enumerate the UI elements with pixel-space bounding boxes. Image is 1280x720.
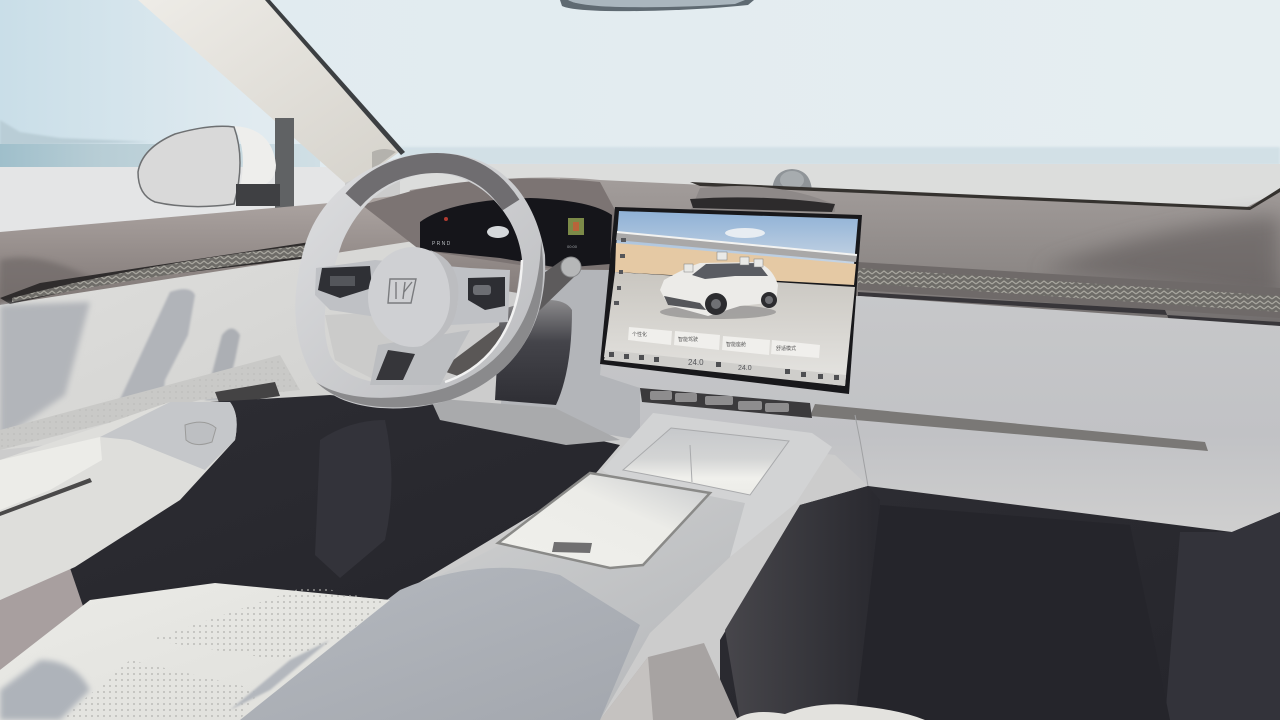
dock values [688, 358, 752, 372]
dash area right of wheel [430, 270, 640, 445]
card labels: 个性化 [632, 331, 647, 338]
side mirror [138, 118, 294, 208]
card labels: 舒适模式 [776, 345, 796, 352]
passenger seat edge [735, 704, 925, 720]
windshield pillar [138, 0, 405, 183]
dashboard upper right [400, 178, 1280, 330]
function cards [628, 327, 820, 358]
camera on dash [772, 169, 812, 194]
card labels: 智能驾驶 [678, 336, 698, 343]
card labels [632, 331, 796, 352]
door armrest [0, 402, 237, 600]
rear view mirror [560, 0, 754, 11]
centre console [230, 472, 745, 720]
dashboard trim strip [858, 262, 1280, 330]
side icons [614, 238, 626, 305]
instrument cluster hood [362, 178, 615, 270]
stalk knob [520, 257, 581, 310]
driver seat [0, 583, 390, 720]
lower door dark [0, 395, 620, 670]
dock icons [609, 352, 839, 380]
card labels: 智能座舱 [726, 341, 746, 348]
central touch screen [600, 207, 862, 394]
air vent controls [640, 388, 812, 418]
centre console rear bin [602, 413, 832, 557]
dock values: 24.0 [688, 358, 704, 367]
background: sky and sea [0, 0, 1280, 237]
callout tags [684, 252, 763, 272]
instrument cluster [420, 198, 612, 268]
floor and footwell [720, 486, 1280, 720]
dashboard lower panel [545, 290, 1280, 532]
steering wheel [295, 153, 545, 408]
steering wheel logo [388, 279, 416, 303]
left door [0, 178, 560, 450]
instrument cluster: 00:00 [567, 244, 578, 249]
dock values: 24.0 [738, 365, 752, 372]
instrument cluster: P R N D [432, 241, 451, 247]
car on screen [660, 262, 778, 319]
